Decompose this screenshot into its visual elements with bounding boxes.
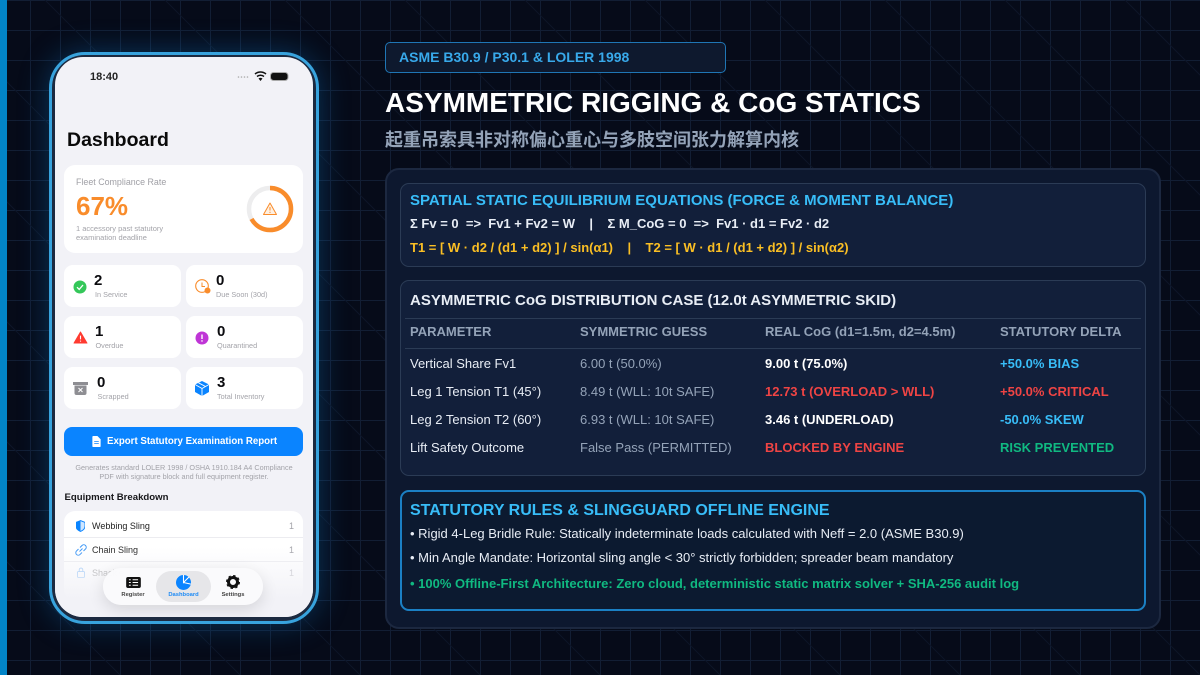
equations heading: SPATIAL STATIC EQUILIBRIUM EQUATIONS (FORCE & MOMENT BALANCE) — [410, 192, 953, 209]
table row: outcome: False Pass (PERMITTED) — [580, 440, 732, 455]
compliance note — [76, 224, 163, 242]
rule: offline: • 100% Offline-First Architecture: Zero cloud, deterministic static matrix solver + SHA-256 audit log — [410, 576, 1019, 591]
due soon icon — [195, 279, 210, 294]
active tab highlight — [156, 571, 211, 602]
export note: Generates standard LOLER 1998 / OSHA 1910.184 A4 Compliance — [75, 462, 293, 472]
status bar icons — [238, 71, 288, 81]
webbing sling row — [76, 520, 294, 532]
dashboard heading: Dashboard — [67, 129, 169, 151]
table row: vertical share: 6.00 t (50.0%) — [580, 356, 662, 371]
table row: leg 1 tension — [410, 384, 1109, 399]
subtitle: 起重吊索具非对称偏心重心与多肢空间张力解算内核 — [385, 130, 799, 150]
table row: vertical share: +50.0% BIAS — [1000, 356, 1079, 371]
stat: quarantined — [186, 316, 303, 358]
register label: Register — [121, 592, 145, 598]
stat: in service: 2 — [94, 272, 102, 289]
chain sling row: Chain Sling — [92, 545, 138, 555]
scrapped icon — [73, 382, 88, 395]
stat: in service — [64, 265, 181, 307]
export note: PDF with signature block and full equipment register. — [99, 472, 269, 481]
stat: overdue: 1 — [95, 323, 103, 340]
table row: leg 1 tension: +50.0% CRITICAL — [1000, 384, 1109, 399]
status bar time: 18:40 — [90, 71, 118, 83]
table row: leg 2 tension — [410, 412, 1084, 427]
tension equation: T1 = [ W · d2 / (d1 + d2) ] / sin(α1) | T2 = [ W · d1 / (d1 + d2) ] / sin(α2) — [410, 240, 849, 255]
force and moment equation: Σ Fv = 0 => Fv1 + Fv2 = W | Σ M_CoG = 0 => Fv1 · d1 = Fv2 · d2 — [410, 216, 829, 231]
dashboard icon — [176, 575, 191, 590]
table row: outcome: BLOCKED BY ENGINE — [765, 440, 904, 455]
table header row: REAL CoG (d1=1.5m, d2=4.5m) — [765, 324, 956, 339]
chain sling row — [64, 537, 303, 561]
stat: quarantined: Quarantined — [217, 341, 257, 350]
compliance value: 67% — [76, 191, 128, 221]
webbing sling row: Webbing Sling — [92, 521, 150, 531]
stat: scrapped: Scrapped — [98, 392, 129, 401]
phone mockup — [49, 52, 319, 624]
stat: total inventory — [186, 367, 303, 409]
breakdown list — [64, 511, 303, 601]
shackle row: Shackle — [92, 568, 124, 578]
stat: due soon — [186, 265, 303, 307]
in service icon — [74, 280, 86, 294]
table row: leg 1 tension: 8.49 t (WLL: 10t SAFE) — [580, 384, 714, 399]
breakdown heading: Equipment Breakdown — [64, 492, 168, 503]
table row: vertical share — [410, 356, 1079, 371]
panel: distribution table — [400, 280, 1146, 476]
stat: overdue: Overdue — [96, 341, 124, 350]
tab bar — [103, 568, 263, 605]
table row: leg 2 tension: -50.0% SKEW — [1000, 412, 1084, 427]
table row: outcome: RISK PREVENTED — [1000, 440, 1114, 455]
stat: due soon: Due Soon (30d) — [216, 290, 268, 299]
rule: bridle: • Rigid 4-Leg Bridle Rule: Statically indeterminate loads calculated with Neff = 2.0 (ASME B30.9) — [410, 526, 964, 541]
table row: leg 1 tension: 12.73 t (OVERLOAD > WLL) — [765, 384, 934, 399]
table header row — [405, 318, 1141, 349]
shackle row: 1 — [289, 568, 294, 578]
dashboard label: Dashboard — [168, 592, 199, 598]
compliance ring — [246, 186, 294, 232]
table row: vertical share: 9.00 t (75.0%) — [765, 356, 847, 371]
table row: leg 2 tension: 3.46 t (UNDERLOAD) — [765, 412, 894, 427]
compliance label: Fleet Compliance Rate — [76, 177, 166, 187]
bottom fade — [55, 547, 313, 617]
table row: outcome: Lift Safety Outcome — [410, 440, 524, 455]
table row: vertical share: Vertical Share Fv1 — [410, 356, 516, 371]
compliance note: examination deadline — [76, 233, 147, 242]
main panel — [385, 168, 1161, 629]
export button — [64, 427, 303, 456]
rule: min angle: • Min Angle Mandate: Horizontal sling angle < 30° strictly forbidden; spreader beam mandatory — [410, 550, 953, 565]
stat: total inventory: 3 — [217, 374, 225, 391]
stat: scrapped: 0 — [97, 374, 105, 391]
title: ASYMMETRIC RIGGING & CoG STATICS — [385, 87, 921, 118]
register icon — [126, 577, 141, 588]
compliance note: 1 accessory past statutory — [76, 224, 163, 232]
chain sling row: 1 — [289, 545, 294, 555]
shackle row — [64, 561, 303, 585]
table row: outcome — [410, 440, 1114, 455]
table header row: SYMMETRIC GUESS — [580, 324, 707, 339]
panel: equilibrium equations — [400, 183, 1146, 267]
left accent bar — [0, 0, 7, 675]
table row: leg 1 tension: Leg 1 Tension T1 (45°) — [410, 384, 541, 399]
export note — [75, 462, 293, 481]
table heading: ASYMMETRIC CoG DISTRIBUTION CASE (12.0t ASYMMETRIC SKID) — [410, 292, 896, 309]
table header row: PARAMETER — [410, 324, 491, 339]
stat: scrapped — [64, 367, 181, 409]
stat: in service: In Service — [95, 290, 127, 299]
quarantined icon — [196, 332, 208, 344]
overdue icon — [74, 332, 88, 344]
compliance card — [64, 165, 303, 253]
table row: leg 2 tension: Leg 2 Tension T2 (60°) — [410, 412, 541, 427]
total inventory icon — [195, 381, 209, 396]
document icon — [92, 436, 101, 447]
stat: overdue — [64, 316, 181, 358]
phone screen — [55, 57, 313, 617]
stat: due soon: 0 — [216, 272, 224, 289]
rules heading: STATUTORY RULES & SLINGGUARD OFFLINE ENGINE — [410, 502, 830, 519]
stat: quarantined: 0 — [217, 323, 225, 340]
settings label: Settings — [222, 592, 244, 598]
settings icon — [226, 575, 240, 589]
stat: total inventory: Total Inventory — [217, 392, 264, 401]
webbing sling row: 1 — [289, 521, 294, 531]
standards badge: ASME B30.9 / P30.1 & LOLER 1998 — [399, 49, 629, 65]
table header row: STATUTORY DELTA — [1000, 324, 1122, 339]
panel: statutory rules — [400, 490, 1146, 611]
table row: leg 2 tension: 6.93 t (WLL: 10t SAFE) — [580, 412, 714, 427]
button label: Export Statutory Examination Report — [107, 436, 277, 447]
standards badge — [385, 42, 726, 73]
